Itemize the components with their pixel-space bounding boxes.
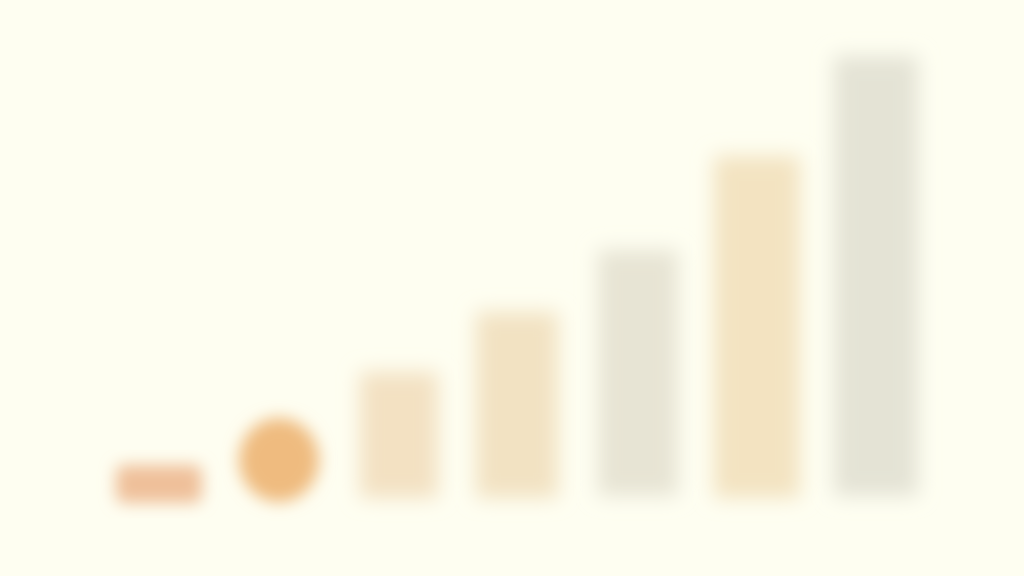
bar 1 <box>116 465 202 503</box>
bar 5 <box>598 250 678 496</box>
bar 2: circle <box>239 418 319 502</box>
bar 6 <box>714 156 800 498</box>
bar 3 <box>360 372 438 498</box>
bar 7 <box>834 56 918 496</box>
bar 4 <box>476 312 558 498</box>
